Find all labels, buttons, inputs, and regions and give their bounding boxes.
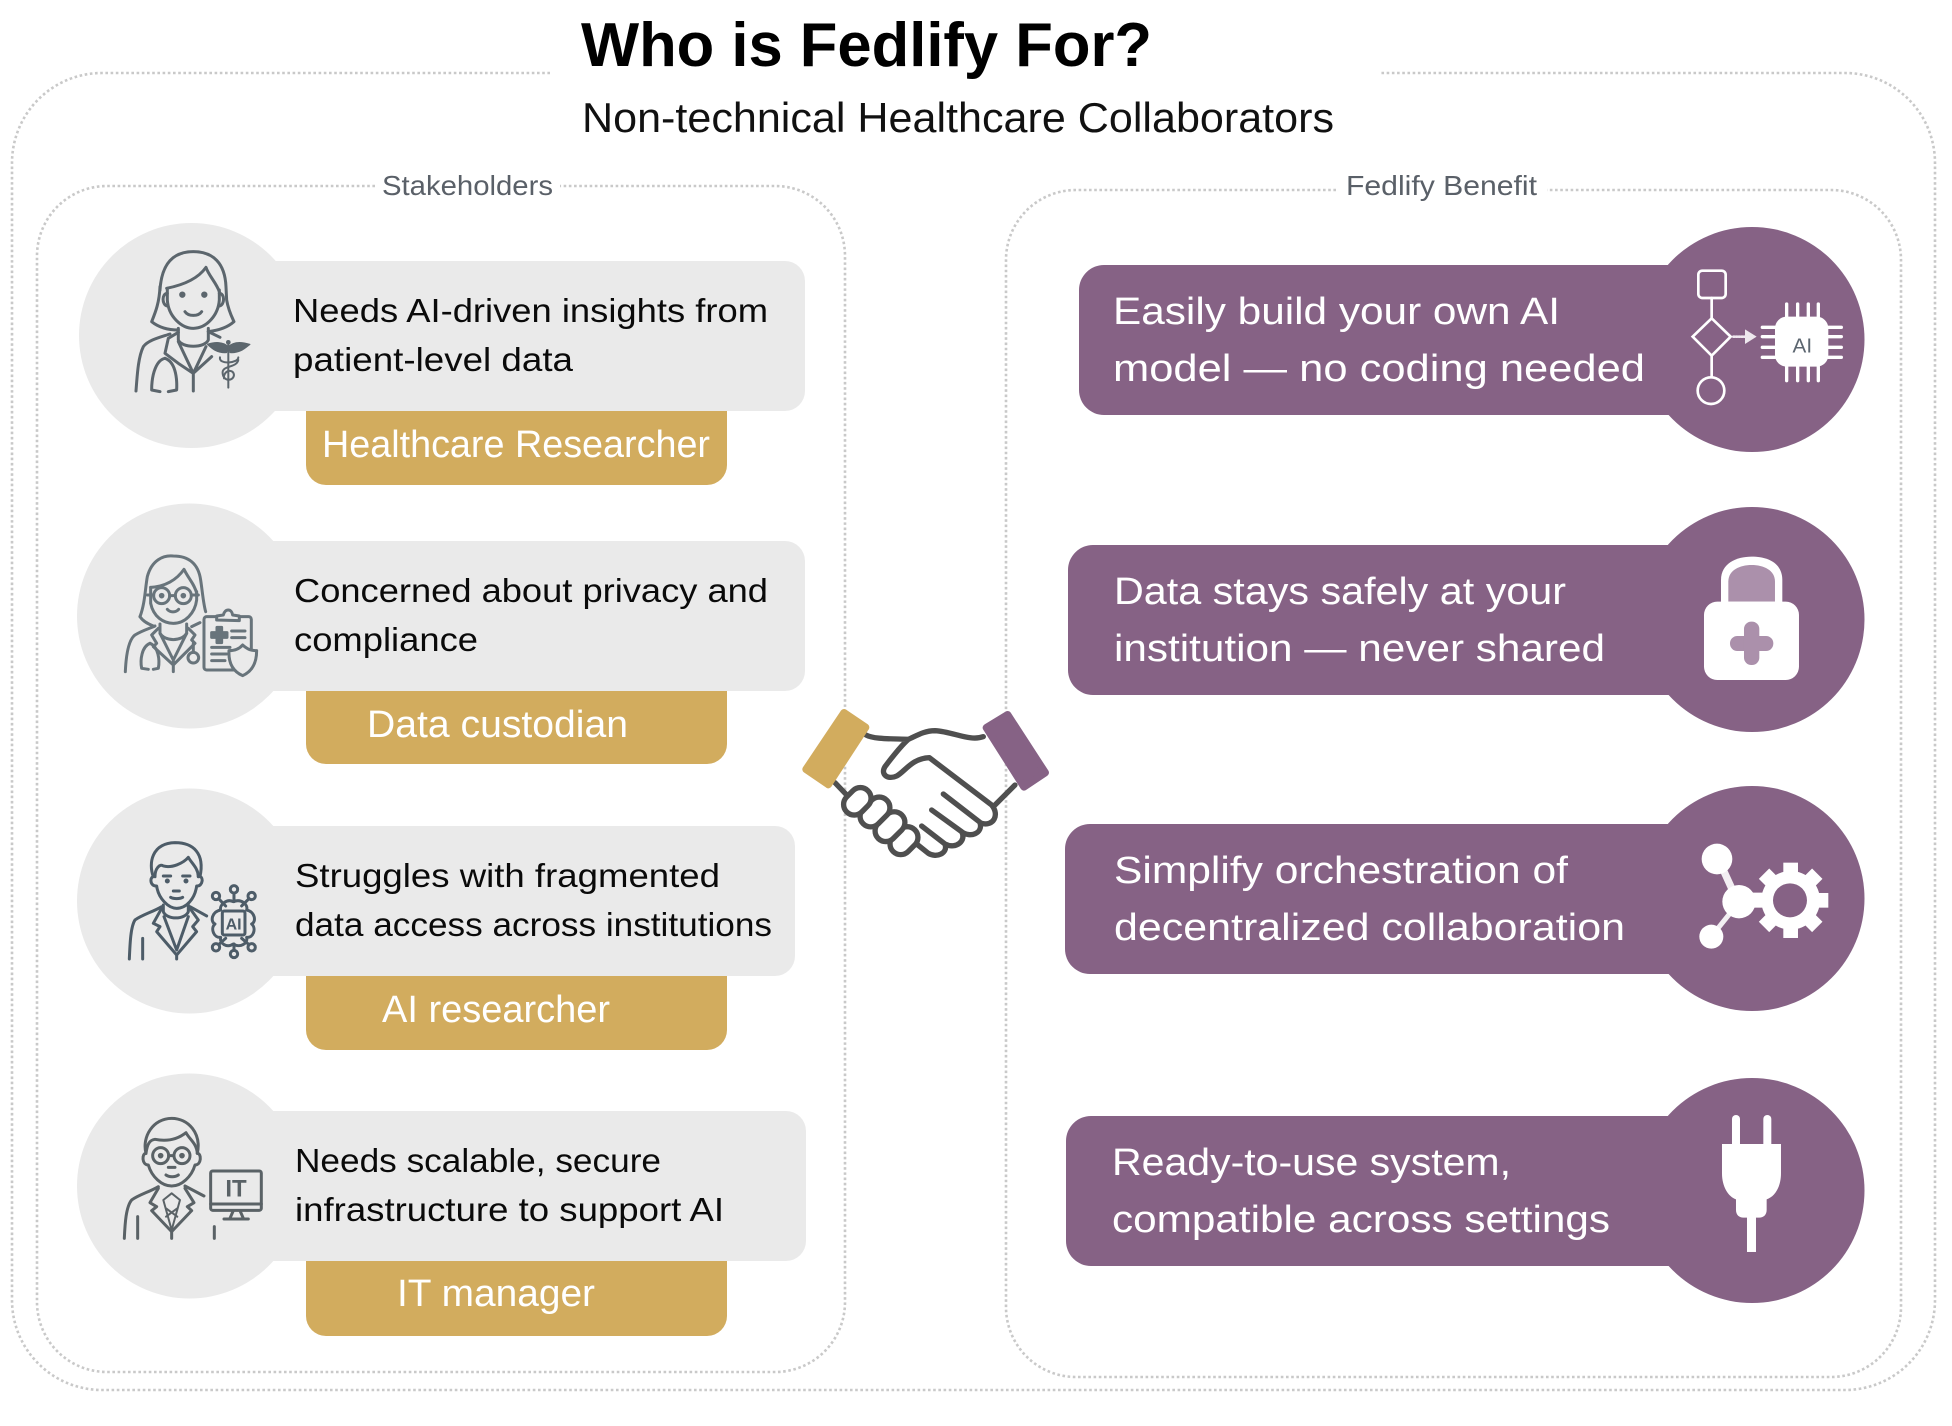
benefit card: data stays local (1068, 507, 1864, 732)
benefit card: ready to use (1066, 1078, 1864, 1303)
icon: male AI researcher with AI brain: AI (226, 916, 242, 933)
need card: healthcare researcher (79, 223, 805, 448)
benefit card: build AI model: model — no coding needed (1113, 348, 1645, 390)
benefit card: orchestration: decentralized collaboration (1114, 907, 1625, 949)
benefit: orchestration (1065, 786, 1864, 1011)
panel: stakeholders (37, 170, 845, 1372)
need card: IT manager (77, 1074, 806, 1298)
icon: handshake (806, 713, 1045, 859)
need card: data custodian: compliance (294, 622, 478, 659)
benefit card: build AI model (1079, 227, 1864, 452)
benefit card: build AI model: Easily build your own AI (1113, 291, 1560, 333)
stakeholder: IT manager (77, 1074, 806, 1336)
icon: medical padlock (1704, 557, 1799, 680)
need card: IT manager: infrastructure to support AI (295, 1192, 724, 1229)
benefit: ready to use (1066, 1078, 1864, 1303)
benefit card: ready to use: compatible across settings (1112, 1199, 1610, 1241)
stakeholders frame (37, 186, 845, 1372)
benefit heading: Fedlify Benefit (1346, 170, 1537, 201)
role tag: healthcare researcher: Healthcare Researcher (322, 424, 710, 466)
role tag: healthcare researcher (306, 405, 727, 485)
title: Who is Fedlify For? (581, 11, 1152, 80)
role tag: AI researcher: AI researcher (382, 989, 610, 1031)
role tag: IT manager: IT manager (397, 1273, 595, 1315)
need card: AI researcher: data access across institutions (295, 907, 772, 944)
need card: AI researcher (77, 788, 795, 1014)
need card: IT manager: Needs scalable, secure (295, 1143, 661, 1180)
icon: workflow into AI chip (1693, 271, 1841, 404)
stakeholder: AI researcher (77, 788, 795, 1050)
icon: male AI researcher with AI brain (129, 843, 255, 959)
need card: data custodian (77, 504, 805, 728)
need card: data custodian: Concerned about privacy and (294, 573, 768, 610)
benefit frame (1006, 190, 1901, 1377)
subtitle: Non-technical Healthcare Collaborators (582, 94, 1334, 141)
role tag: data custodian (306, 685, 727, 764)
stakeholder: healthcare researcher (79, 223, 805, 485)
stakeholders heading: Stakeholders (382, 170, 553, 201)
icon: IT manager with monitor (124, 1118, 261, 1238)
icon: female doctor with caduceus (136, 252, 250, 392)
stakeholder: data custodian (77, 504, 805, 764)
icon: network nodes and gear (1699, 844, 1828, 949)
icon: IT manager with monitor: IT (225, 1176, 247, 1203)
benefit card: orchestration (1065, 786, 1864, 1011)
role tag: data custodian: Data custodian (367, 704, 628, 746)
need card: healthcare researcher: Needs AI-driven insights from (293, 293, 768, 330)
icon: workflow into AI chip: AI (1793, 335, 1812, 358)
need card: healthcare researcher: patient-level data (293, 342, 573, 379)
benefit: data stays local (1068, 507, 1864, 732)
icon: power plug (1722, 1115, 1781, 1252)
icon: female data custodian with clipboard and shield (125, 556, 257, 676)
benefit card: data stays local: Data stays safely at your (1114, 571, 1566, 613)
panel: Fedlify benefit (1006, 170, 1901, 1377)
benefit: build AI model (1079, 227, 1864, 452)
benefit card: data stays local: institution — never shared (1114, 628, 1605, 670)
benefit card: orchestration: Simplify orchestration of (1114, 850, 1568, 892)
benefit card: ready to use: Ready-to-use system, (1112, 1142, 1511, 1184)
role tag: IT manager (306, 1255, 727, 1336)
role tag: AI researcher (306, 970, 727, 1050)
need card: AI researcher: Struggles with fragmented (295, 858, 720, 895)
